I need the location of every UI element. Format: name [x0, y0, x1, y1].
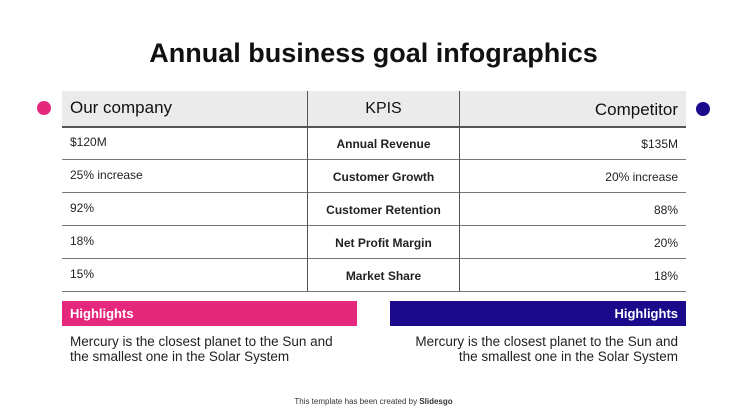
text: competitor highlight	[415, 334, 678, 364]
table: Customer Growth	[333, 170, 434, 184]
text: our company highlight: the smallest one in the Solar System	[70, 349, 289, 364]
highlight bar: our company	[62, 301, 357, 326]
table: KPIS	[365, 100, 402, 117]
table	[62, 91, 686, 292]
table: Market Share	[346, 269, 421, 283]
table: Customer Retention	[326, 203, 441, 217]
table: Net Profit Margin	[335, 236, 432, 250]
highlight bar: competitor: Highlights	[614, 306, 678, 321]
table: 20%	[654, 236, 678, 250]
icon: pink dot	[37, 101, 51, 115]
table: Competitor	[595, 100, 678, 119]
header row	[62, 91, 686, 128]
text: competitor highlight: the smallest one in the Solar System	[459, 349, 678, 364]
table: 18%	[654, 269, 678, 283]
title: Annual business goal infographics	[149, 38, 598, 68]
highlight bar: competitor	[390, 301, 686, 326]
table: 15%	[70, 267, 94, 281]
table: 92%	[70, 201, 94, 215]
text: our company highlight	[70, 334, 333, 364]
table: Our company	[70, 98, 172, 117]
table: Annual Revenue	[336, 137, 431, 151]
text: our company highlight: Mercury is the closest planet to the Sun and	[70, 334, 333, 349]
table: $135M	[641, 137, 678, 151]
footer: This template has been created by Slidesgo	[294, 397, 453, 406]
table: 18%	[70, 234, 94, 248]
table: 25% increase	[70, 168, 143, 182]
table: 88%	[654, 203, 678, 217]
text: competitor highlight: Mercury is the closest planet to the Sun and	[415, 334, 678, 349]
table: $120M	[70, 135, 107, 149]
icon: blue dot	[696, 102, 710, 116]
highlight bar: our company: Highlights	[70, 306, 134, 321]
table: 20% increase	[605, 170, 678, 184]
